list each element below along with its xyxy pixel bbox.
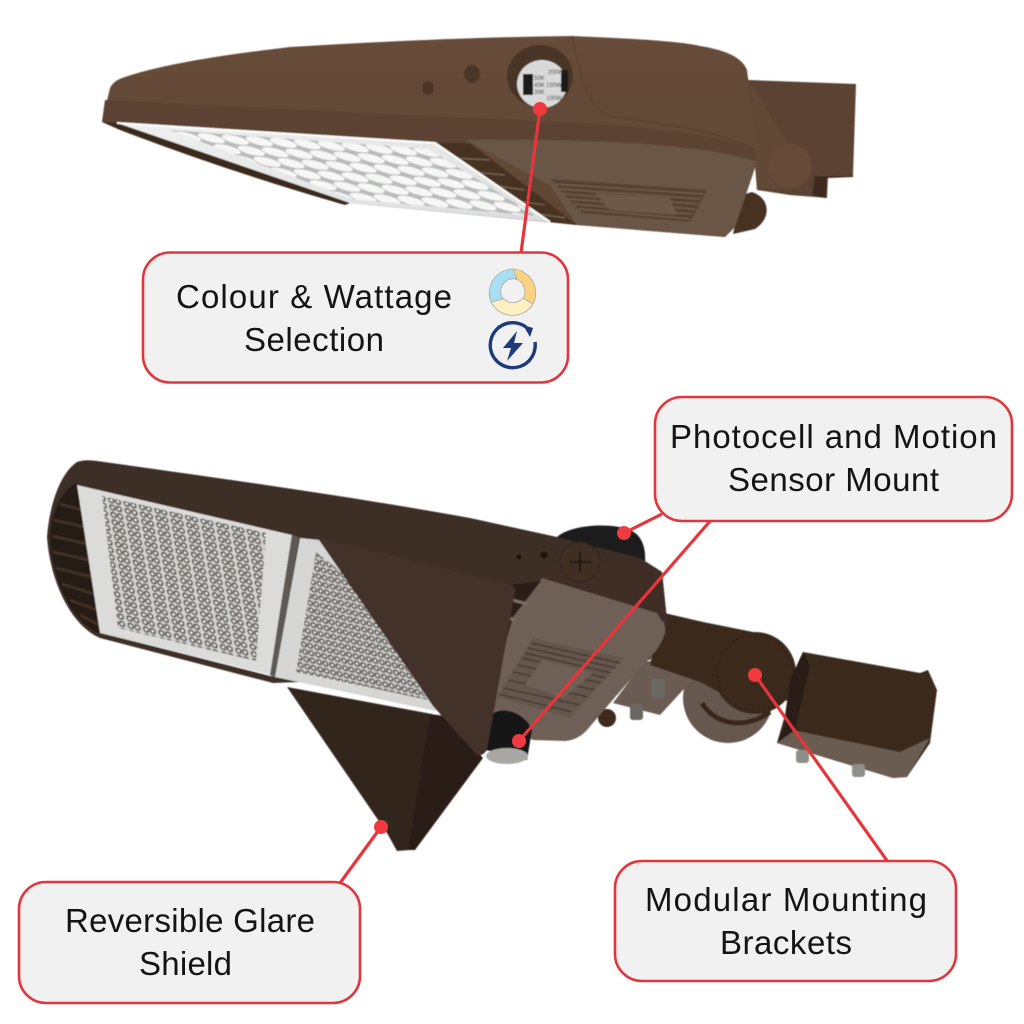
glare shield upper [317,537,515,755]
connector lines [340,109,888,883]
heat sink vents [435,143,577,225]
callout text: Colour & Wattage [176,278,452,315]
vent square [497,638,623,718]
switch labels: 35K [534,90,545,96]
callout text: Modular Mounting [645,881,927,918]
icon: colour cycle ring [489,269,536,315]
callout text: Photocell and Motion [670,418,997,455]
callout: reversible glare shield [19,882,360,1003]
callout text: Selection [244,321,384,358]
LED panel [117,123,550,222]
rear heat sink vents [50,483,100,634]
callout text [176,278,452,358]
lower driver plate [466,140,757,237]
switch labels: 40K [534,83,545,89]
callout text [65,902,315,982]
vent square [550,179,707,222]
bolts [598,679,865,777]
LED panel right [275,538,440,712]
clamp [683,653,773,743]
icon: wattage power cycle [490,323,535,368]
slip fitter box [777,652,937,778]
callout: photocell and motion sensor mount [655,397,1012,521]
callout text [670,418,997,498]
callout text: Shield [139,945,232,982]
driver plate [490,558,667,741]
glare shield lower [287,687,483,851]
switch labels [534,70,564,102]
switch labels: 100W [546,96,562,102]
callout text: Reversible Glare [65,902,315,939]
callout text: Sensor Mount [728,461,939,498]
top sensor cap [557,526,645,562]
callout: colour and wattage selection [143,252,568,382]
sensor socket with selector switches [507,45,573,108]
LED panel left [77,485,299,678]
tilt dial [714,632,796,714]
housing [102,36,757,237]
callout text [645,881,927,961]
mounting bracket rear [733,80,856,234]
bottom luminaire [47,460,937,851]
switch labels: 50K [534,76,545,82]
bottom sensor [486,710,532,764]
mounting arm [613,612,796,715]
underside [102,122,350,205]
callout: modular mounting brackets [615,861,956,981]
switch labels: 200W [548,70,564,76]
housing [47,460,667,660]
callout text: Brackets [720,924,852,961]
photocell button and holes [516,542,600,582]
top luminaire [102,36,856,237]
connector dots [374,102,762,834]
screw holes [422,65,480,95]
switch labels: 150W [546,83,562,89]
